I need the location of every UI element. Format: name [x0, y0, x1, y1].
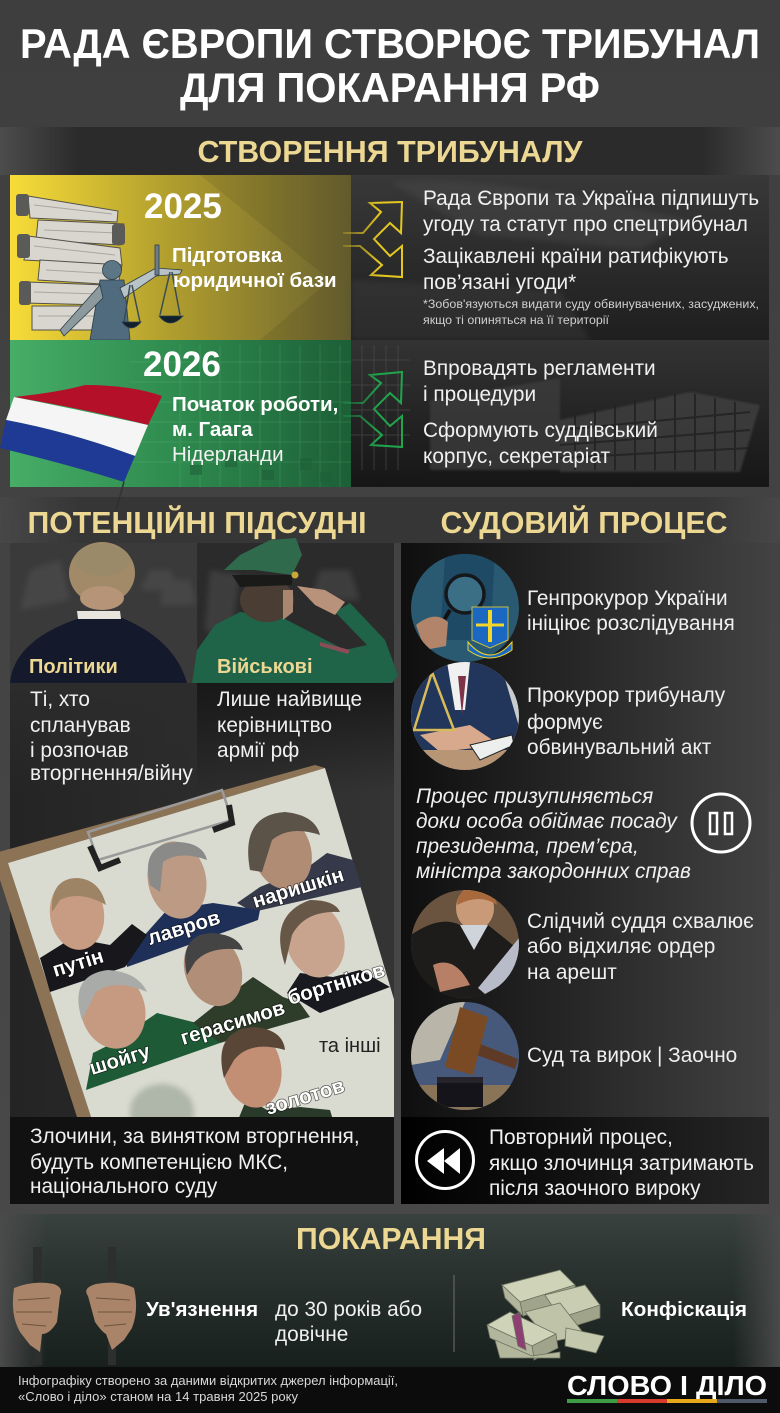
name labels: шойгу — [87, 1039, 153, 1080]
face: путін — [40, 875, 147, 992]
text: генпрокурор: Генпрокурор України — [527, 587, 728, 610]
name labels: лавров — [145, 906, 223, 950]
text: підготовка юридичної бази: Підготовка — [172, 244, 283, 267]
name labels — [50, 863, 388, 1120]
icon: hands on prison bars — [13, 1247, 136, 1365]
clipboard with faces — [0, 765, 394, 1117]
text: прокурор трибуналу: формує — [527, 711, 603, 734]
text: слідчий суддя — [527, 910, 754, 984]
text: підготовка юридичної бази — [172, 244, 337, 292]
text: повторний процес — [489, 1126, 754, 1200]
face: бортніков — [277, 896, 390, 1013]
image: gavel — [411, 1002, 519, 1110]
text: повторний процес: Повторний процес, — [489, 1126, 673, 1149]
image: magnifying glass and emblem — [411, 554, 519, 662]
text: до 30 років: до 30 років або — [275, 1298, 422, 1321]
title — [20, 20, 760, 111]
panel: compentence note — [10, 1117, 394, 1204]
face: герасимов — [184, 933, 310, 1043]
text: прокурор трибуналу: обвинувальний акт — [527, 736, 712, 759]
text: військові: армії рф — [217, 739, 299, 762]
text: військові: керівництво — [217, 714, 332, 737]
icon: yellow arrows — [343, 202, 402, 277]
text: ратифікація: пов’язані угоди* — [423, 271, 576, 294]
text: регламенти — [423, 357, 656, 406]
panel: compentence note: Злочини, за винятком вторгнення, — [30, 1125, 360, 1148]
text: угода та статут: угоду та статут про спецтрибунал — [423, 213, 748, 236]
heading: судовий процес: СУДОВИЙ ПРОЦЕС — [440, 504, 728, 540]
text: угода та статут — [423, 187, 759, 236]
panel: судовий процес — [401, 543, 769, 1204]
text: підготовка юридичної бази: юридичної бази — [173, 269, 337, 292]
icon: lady justice statue — [60, 245, 183, 340]
text: слідчий суддя: Слідчий суддя схвалює — [527, 910, 754, 933]
text: початок роботи: Початок роботи, — [172, 393, 338, 416]
icon: stacked binders — [16, 194, 125, 330]
name labels: золотов — [263, 1074, 347, 1120]
text: повторний процес: якщо злочинця затримають — [489, 1152, 754, 1175]
name labels: герасимов — [178, 996, 288, 1050]
text: військові: Лише найвище — [217, 688, 362, 711]
text: слідчий суддя: на арешт — [527, 961, 617, 984]
image: politician from behind — [10, 542, 187, 683]
year: 2025: 2025 — [144, 187, 222, 226]
panel: 2025 outcomes — [343, 175, 769, 340]
text: суддівський корпус — [423, 419, 658, 468]
icon: Netherlands flag — [0, 385, 162, 510]
text: початок роботи: м. Гаага — [172, 418, 253, 441]
face: наришкін — [237, 807, 362, 912]
panel: compentence note: національного суду — [30, 1175, 218, 1198]
panel: повторний процес — [401, 1117, 769, 1204]
year: 2026: 2026 — [143, 345, 221, 384]
icon: rewind — [416, 1132, 474, 1188]
footer source text: Інфографіку створено за даними відкритих джерел інформації, — [18, 1373, 398, 1388]
text: слідчий суддя: або відхиляє ордер — [527, 935, 715, 958]
panel: потенційні підсудні — [0, 538, 430, 1204]
text: повторний процес: після заочного вироку — [489, 1177, 701, 1200]
face: лавров — [125, 836, 260, 967]
panel: compentence note: будуть компетенцією МКС, — [30, 1151, 288, 1174]
text: до 30 років — [275, 1298, 422, 1346]
text: суд та вирок: Суд та вирок | Заочно — [527, 1044, 737, 1067]
image: prosecutor — [411, 662, 520, 770]
text: прокурор трибуналу — [527, 684, 726, 759]
text: ув'язнення: Ув'язнення — [146, 1298, 258, 1321]
face: шойгу (drawn under герасимов jacket) — [72, 964, 220, 1090]
text: генпрокурор — [527, 587, 735, 635]
face: золотов — [221, 1027, 332, 1117]
text: політики: вторгнення/війну — [30, 762, 193, 785]
panel: 2026 outcomes — [343, 340, 769, 487]
text: генпрокурор: ініціює розслідування — [527, 612, 735, 635]
text: угода та статут: Рада Європи та Україна підпишуть — [423, 187, 759, 210]
text: початок роботи — [172, 393, 338, 466]
title: РАДА ЄВРОПИ СТВОРЮЄ ТРИБУНАЛ — [20, 20, 760, 67]
footer source text — [18, 1373, 398, 1404]
text: конфіскація: Конфіскація — [621, 1298, 747, 1321]
text: регламенти: і процедури — [423, 383, 536, 406]
panel: 2025 — [10, 175, 351, 340]
footer source text: «Слово і діло» станом на 14 травня 2025 року — [18, 1389, 298, 1404]
text: регламенти: Впровадять регламенти — [423, 357, 656, 380]
icon: pause — [692, 794, 750, 852]
text: процес призупиняється: Процес призупиняється — [416, 785, 653, 808]
logo: слово і діло: СЛОВО І ДІЛО — [567, 1370, 767, 1401]
label: та інші: та інші — [319, 1035, 381, 1057]
text: суддівський корпус: Сформують суддівський — [423, 419, 658, 442]
panel: покарання — [0, 1214, 780, 1367]
footnote: *Зобов'язуються видати суду обвинувачених, засуджених, — [423, 297, 759, 311]
text: ратифікація: Зацікавлені країни ратифікують — [423, 245, 729, 268]
icon: money stacks — [487, 1270, 604, 1360]
text: політики — [30, 688, 193, 785]
label: політики: Політики — [29, 656, 118, 678]
title: ДЛЯ ПОКАРАННЯ РФ — [180, 64, 600, 111]
name labels: путін — [50, 945, 106, 982]
heading: потенційні підсудні: ПОТЕНЦІЙНІ ПІДСУДНІ — [28, 504, 366, 540]
footer — [0, 1367, 780, 1413]
image: investigative judge — [411, 886, 519, 998]
panel: 2026 — [0, 340, 351, 510]
icon: green arrows — [343, 372, 402, 447]
text: процес призупиняється: президента, прем’єра, — [416, 835, 639, 858]
blurred background figure — [128, 1082, 196, 1117]
text: політики: спланував — [30, 714, 131, 737]
text: процес призупиняється: міністра закордонних справ — [416, 860, 691, 883]
text: прокурор трибуналу: Прокурор трибуналу — [527, 684, 726, 707]
text: суддівський корпус: корпус, секретаріат — [423, 445, 611, 468]
text: військові — [217, 688, 362, 762]
footnote: якщо ті опиняться на її території — [423, 313, 610, 327]
heading: створення трибуналу: СТВОРЕННЯ ТРИБУНАЛУ — [198, 134, 583, 169]
name labels: бортніков — [285, 958, 388, 1010]
footnote — [423, 297, 759, 327]
text: процес призупиняється — [416, 785, 691, 883]
heading: покарання: ПОКАРАННЯ — [296, 1221, 486, 1256]
text: початок роботи: Нідерланди — [172, 443, 284, 466]
text: ратифікація — [423, 245, 729, 294]
clipboard clip — [88, 790, 232, 868]
text: політики: Ті, хто — [30, 688, 90, 711]
label: військові: Військові — [217, 656, 313, 678]
image: saluting soldier — [192, 538, 398, 683]
text: до 30 років: довічне — [275, 1323, 348, 1346]
text: політики: і розпочав — [30, 739, 129, 762]
text: процес призупиняється: доки особа обіймає посаду — [416, 810, 678, 833]
name labels: наришкін — [250, 863, 347, 913]
